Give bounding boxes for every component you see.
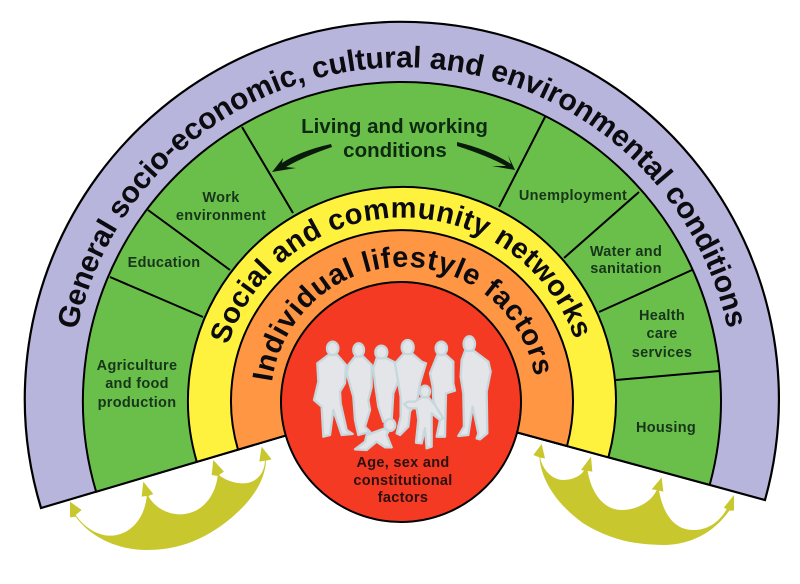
- arrow: right multi-headed arc: [533, 444, 734, 545]
- label: agriculture and food production: and food: [105, 376, 169, 392]
- heading: general socio-economic, cultural and environmental conditions: General socio-economic, cultural and environmental conditions: [58, 46, 742, 327]
- label: agriculture and food production: production: [98, 395, 176, 411]
- panel: living and working conditions band: [83, 82, 721, 492]
- heading: social and community networks: Social and community networks: [211, 202, 588, 342]
- arrow: living conditions to the right: [457, 142, 515, 170]
- label: health care services: services: [632, 345, 692, 361]
- panel: age, sex and constitutional factors circle: [281, 282, 521, 522]
- icon: group of people silhouettes: [314, 336, 491, 450]
- label: unemployment: Unemployment: [519, 188, 627, 204]
- label: age, sex and constitutional factors: Age, sex and: [356, 455, 450, 471]
- label: health care services: Health: [639, 308, 685, 324]
- dividers between living and working sectors: [110, 117, 719, 380]
- label: age, sex and constitutional factors: constitutional: [353, 473, 453, 489]
- label: health care services: care: [646, 326, 678, 342]
- label: age, sex and constitutional factors: factors: [378, 490, 428, 506]
- heading: living and working conditions: conditions: [343, 139, 447, 162]
- label: water and sanitation: sanitation: [590, 261, 662, 277]
- panel: general socio-economic band: [25, 22, 779, 508]
- arrow: left multi-headed arc: [70, 447, 272, 550]
- label: education: Education: [128, 255, 200, 271]
- arrow: living conditions to the left: [272, 144, 332, 172]
- label: work environment: environment: [176, 208, 266, 224]
- label: agriculture and food production: Agriculture: [97, 358, 177, 374]
- heading: individual lifestyle factors: Individual lifestyle factors: [252, 246, 548, 380]
- label: water and sanitation: Water and: [590, 244, 662, 260]
- label: work environment: Work: [202, 190, 240, 206]
- panel: social and community networks band: [188, 187, 616, 462]
- heading: living and working conditions: Living and working: [301, 115, 488, 138]
- label: housing: Housing: [636, 420, 696, 436]
- panel: individual lifestyle factors band: [231, 230, 573, 450]
